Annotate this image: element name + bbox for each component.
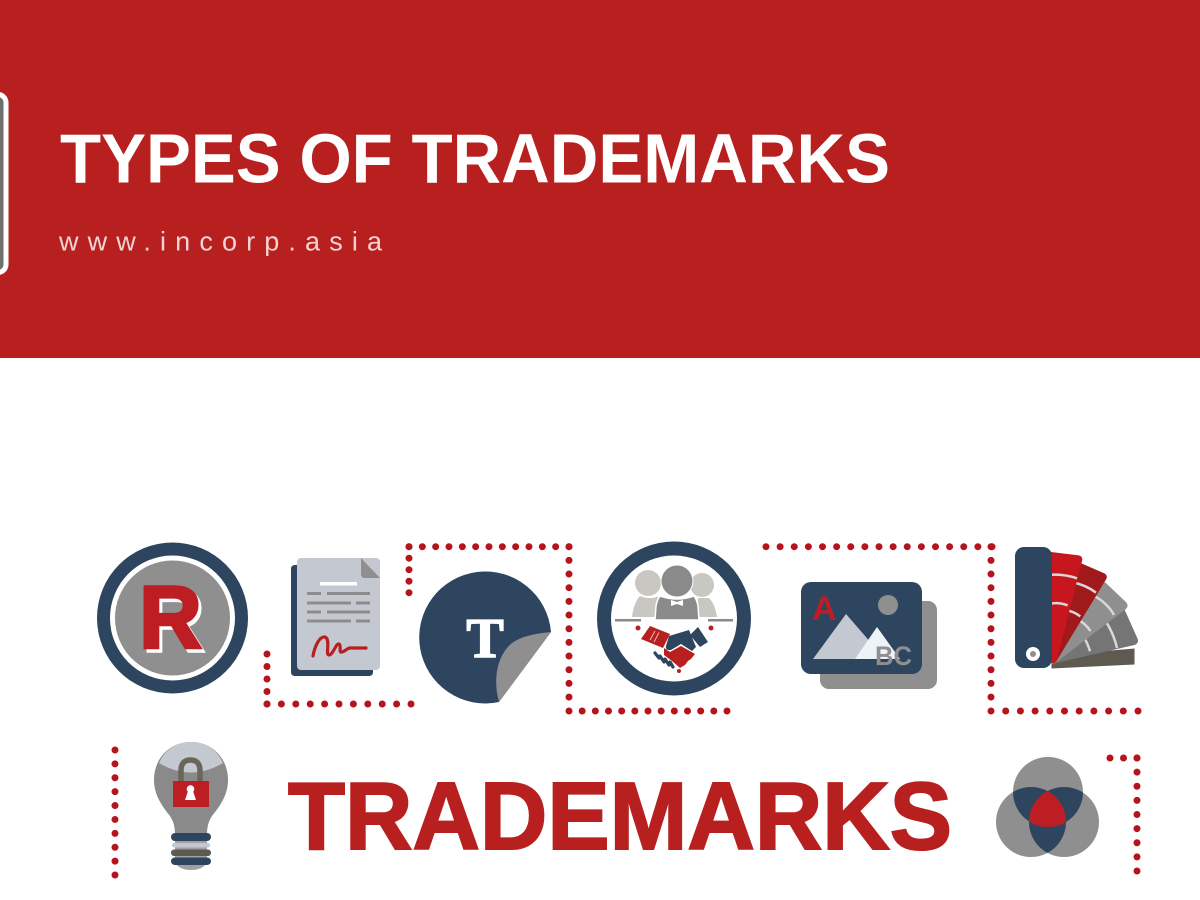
heading: trademarks: TRADEMARKS: [288, 763, 952, 870]
icon: registered R: R: [142, 571, 204, 670]
icon: signed document: [291, 558, 380, 676]
dotted connector: picture and swatch: [766, 547, 1138, 711]
icon: picture with letters: [801, 582, 937, 689]
icon: colour swatch fan: [1015, 547, 1134, 674]
icon: picture with letters: A: [812, 590, 837, 628]
website url: www.incorp.asia: [58, 226, 383, 256]
dotted connector: document: [267, 654, 411, 704]
icon: light bulb with padlock: [154, 742, 228, 870]
icon: people and handshake: [597, 542, 751, 696]
icon: peeling T sticker: [419, 571, 551, 703]
dotted connector: sticker top: [409, 547, 569, 593]
icon: peeling T sticker: T: [466, 608, 504, 670]
logo frame: [0, 94, 6, 272]
dotted line: right of venn: [1110, 758, 1137, 871]
icon: registered R: [97, 542, 248, 694]
dotted connector: sticker right: [569, 547, 727, 711]
dotted line: left of bulb: [112, 750, 118, 875]
title: TYPES OF TRADEMARKS: [60, 120, 890, 198]
handshake: [641, 626, 708, 673]
panel: header banner: [0, 0, 1200, 358]
icon: registered R: R: [140, 568, 202, 666]
icon: picture with letters: BC: [875, 641, 912, 671]
icon: venn diagram: [996, 757, 1099, 857]
